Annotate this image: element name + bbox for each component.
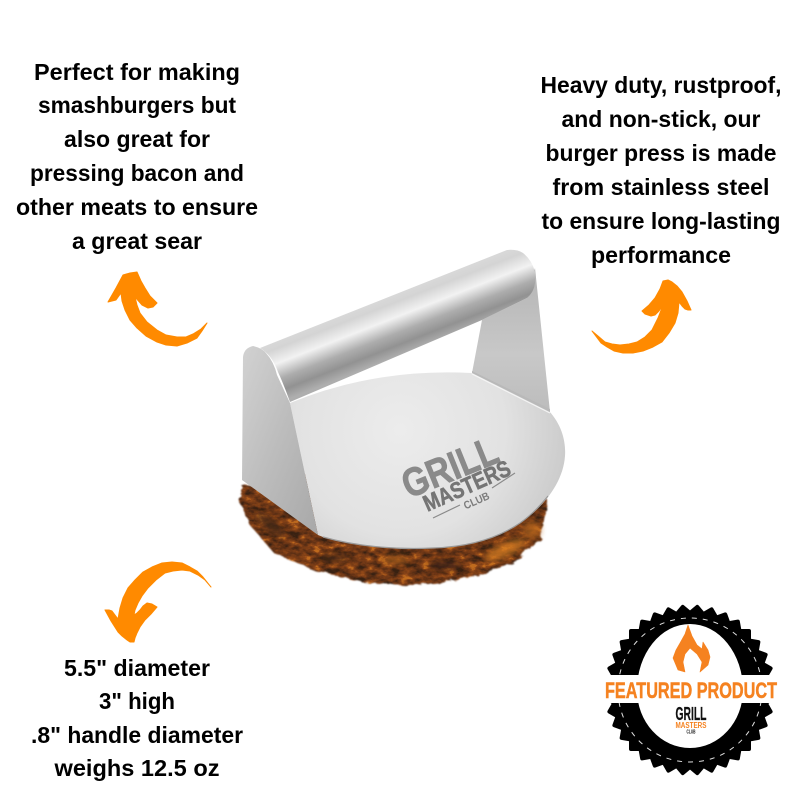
engraved logo: GRILL [396,429,505,507]
text: dimensions: weighs 12.5 oz [53,755,220,781]
small logo: GRILL [676,704,706,724]
text: material and durability: burger press is made [546,140,776,166]
small logo [676,704,707,736]
flame icon [673,625,710,672]
right support plate [472,268,550,412]
text: material and durability [540,72,782,268]
scalloped black seal [604,604,776,776]
burger patty [239,460,548,585]
text: dimensions: 3" high [99,688,175,714]
text: material and durability: to ensure long-lasting [542,208,780,234]
text: material and durability: from stainless steel [552,174,770,200]
text: product uses: also great for [64,126,210,152]
small logo: MASTERS [676,721,707,730]
pressing disc [290,372,565,549]
text: dimensions: .8" handle diameter [31,722,243,748]
arrow: bottom left, curving down [105,562,211,642]
text: material and durability: and non-stick, our [562,106,761,132]
text: product uses: Perfect for making [34,59,240,85]
text: material and durability: performance [591,242,731,268]
burger press with patty [239,250,565,585]
text: product uses: a great sear [72,228,202,254]
arrow: top right, curving up [592,280,691,353]
text: material and durability: Heavy duty, rustproof, [540,72,782,98]
text: product uses: pressing bacon and [30,160,244,186]
small logo: CLUB [686,730,696,736]
disc rim shadow [323,496,548,549]
text: dimensions: 5.5" diameter [64,655,210,681]
engraved logo: MASTERS [419,455,515,516]
left support plate [242,346,318,535]
text: product uses [16,59,258,254]
text: product uses: smashburgers but [38,92,236,118]
handle [260,250,535,402]
engraved logo: CLUB [462,490,492,512]
text: dimensions [31,655,243,781]
text: product uses: other meats to ensure [16,194,258,220]
arrow: top left, curving up [108,272,207,346]
badge: featured product [600,604,780,776]
disc fold line [472,371,550,413]
